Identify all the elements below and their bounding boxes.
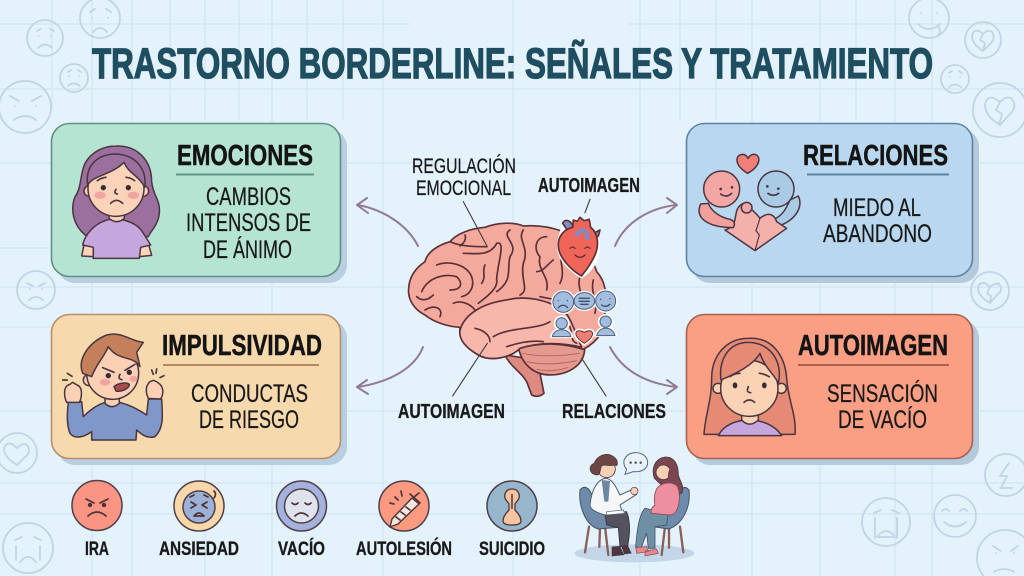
icon: vacío	[276, 481, 326, 531]
emoji: crying bottom right	[862, 498, 910, 546]
label: ira: IRA	[85, 539, 109, 560]
patient	[636, 457, 683, 556]
brain label: autoimagen top: AUTOIMAGEN	[538, 175, 640, 197]
panel: impulsividad	[52, 314, 347, 465]
floor shadow	[574, 544, 694, 562]
emoji: sad right	[941, 65, 969, 93]
heading: relaciones: RELACIONES	[803, 140, 948, 172]
therapist	[590, 454, 638, 556]
arrows from brain to panels	[357, 198, 677, 394]
emoji: angry mid left	[17, 271, 55, 309]
panel: relaciones	[686, 124, 979, 283]
heading: impulsividad: IMPULSIVIDAD	[162, 330, 322, 362]
brain label: relaciones: RELACIONES	[562, 401, 666, 423]
text: cambios intensos de ánimo: DE ÁNIMO	[203, 235, 292, 264]
emoji: broken heart upper right	[973, 83, 1024, 137]
emoji: smile bottom right	[934, 495, 976, 537]
symptom icon row	[72, 480, 545, 560]
label: ansiedad: ANSIEDAD	[159, 539, 239, 560]
brain illustration	[409, 199, 616, 396]
label: vacío: VACÍO	[278, 538, 325, 560]
icon: chat bubbles and people	[552, 291, 616, 344]
icon: angry boy	[63, 334, 164, 440]
speech bubble	[624, 453, 648, 474]
brain label: regulación emocional: REGULACIÓN	[412, 155, 516, 178]
arrow: to autoimagen	[610, 347, 677, 394]
brain folds	[417, 230, 596, 347]
panel: autoimagen	[686, 314, 979, 465]
emoji: tear smile top right	[909, 0, 949, 38]
emoji: crying bottom left	[3, 523, 53, 573]
text: cambios intensos de ánimo	[186, 183, 311, 264]
text: sensación de vacío: DE VACÍO	[838, 405, 927, 434]
icon: suicidio	[487, 481, 537, 531]
cerebrum	[409, 223, 606, 358]
emoji: heart lower left	[0, 433, 37, 473]
brain label: autoimagen bottom: AUTOIMAGEN	[398, 401, 505, 423]
chairs	[580, 487, 689, 555]
emoji: worried left	[60, 64, 88, 92]
brain label: regulación emocional: EMOCIONAL	[416, 177, 511, 200]
cerebellum	[518, 340, 585, 375]
text: cambios intensos de ánimo: CAMBIOS	[206, 183, 291, 211]
text: conductas de riesgo: CONDUCTAS	[191, 380, 308, 408]
arrow: to emociones	[357, 198, 418, 246]
text: miedo al abandono: MIEDO AL	[833, 194, 921, 222]
text: conductas de riesgo: DE RIESGO	[199, 406, 299, 434]
icon: ira	[72, 480, 122, 530]
therapy session illustration	[574, 453, 694, 562]
arrow: to impulsividad	[357, 347, 423, 394]
icon: heart	[557, 217, 600, 278]
icon: sad girl	[73, 146, 159, 258]
brain stem	[505, 355, 544, 396]
text: miedo al abandono	[823, 194, 932, 248]
heading: emociones: EMOCIONES	[177, 140, 313, 172]
icon: couple and broken heart	[699, 154, 800, 251]
label: autolesión: AUTOLESIÓN	[356, 538, 452, 560]
emoji: broken heart mid right	[971, 272, 1009, 310]
text: miedo al abandono: ABANDONO	[823, 220, 932, 248]
temporal lobe	[460, 298, 582, 358]
icon: sad woman	[704, 338, 795, 436]
icon: autolesión	[379, 481, 429, 531]
text: conductas de riesgo	[191, 380, 308, 434]
emoji: crying top left	[80, 0, 120, 38]
pointer lines	[453, 199, 606, 396]
emoji: broken heart top right	[965, 22, 1001, 58]
text: sensación de vacío: SENSACIÓN	[827, 379, 938, 408]
heading: autoimagen: AUTOIMAGEN	[798, 330, 948, 362]
text: sensación de vacío	[827, 379, 938, 434]
label: suicidio: SUICIDIO	[479, 539, 545, 560]
emoji: angry upper left	[0, 81, 51, 133]
emoji: angry bottom right	[977, 530, 1024, 576]
text: cambios intensos de ánimo: INTENSOS DE	[186, 209, 311, 237]
brain label: regulación emocional	[412, 155, 516, 200]
emoji: lightning	[985, 454, 1024, 496]
panel: emociones	[52, 124, 347, 283]
emoji: sad left	[27, 20, 63, 56]
arrow: to relaciones	[615, 198, 677, 246]
icon: ansiedad	[174, 481, 224, 531]
